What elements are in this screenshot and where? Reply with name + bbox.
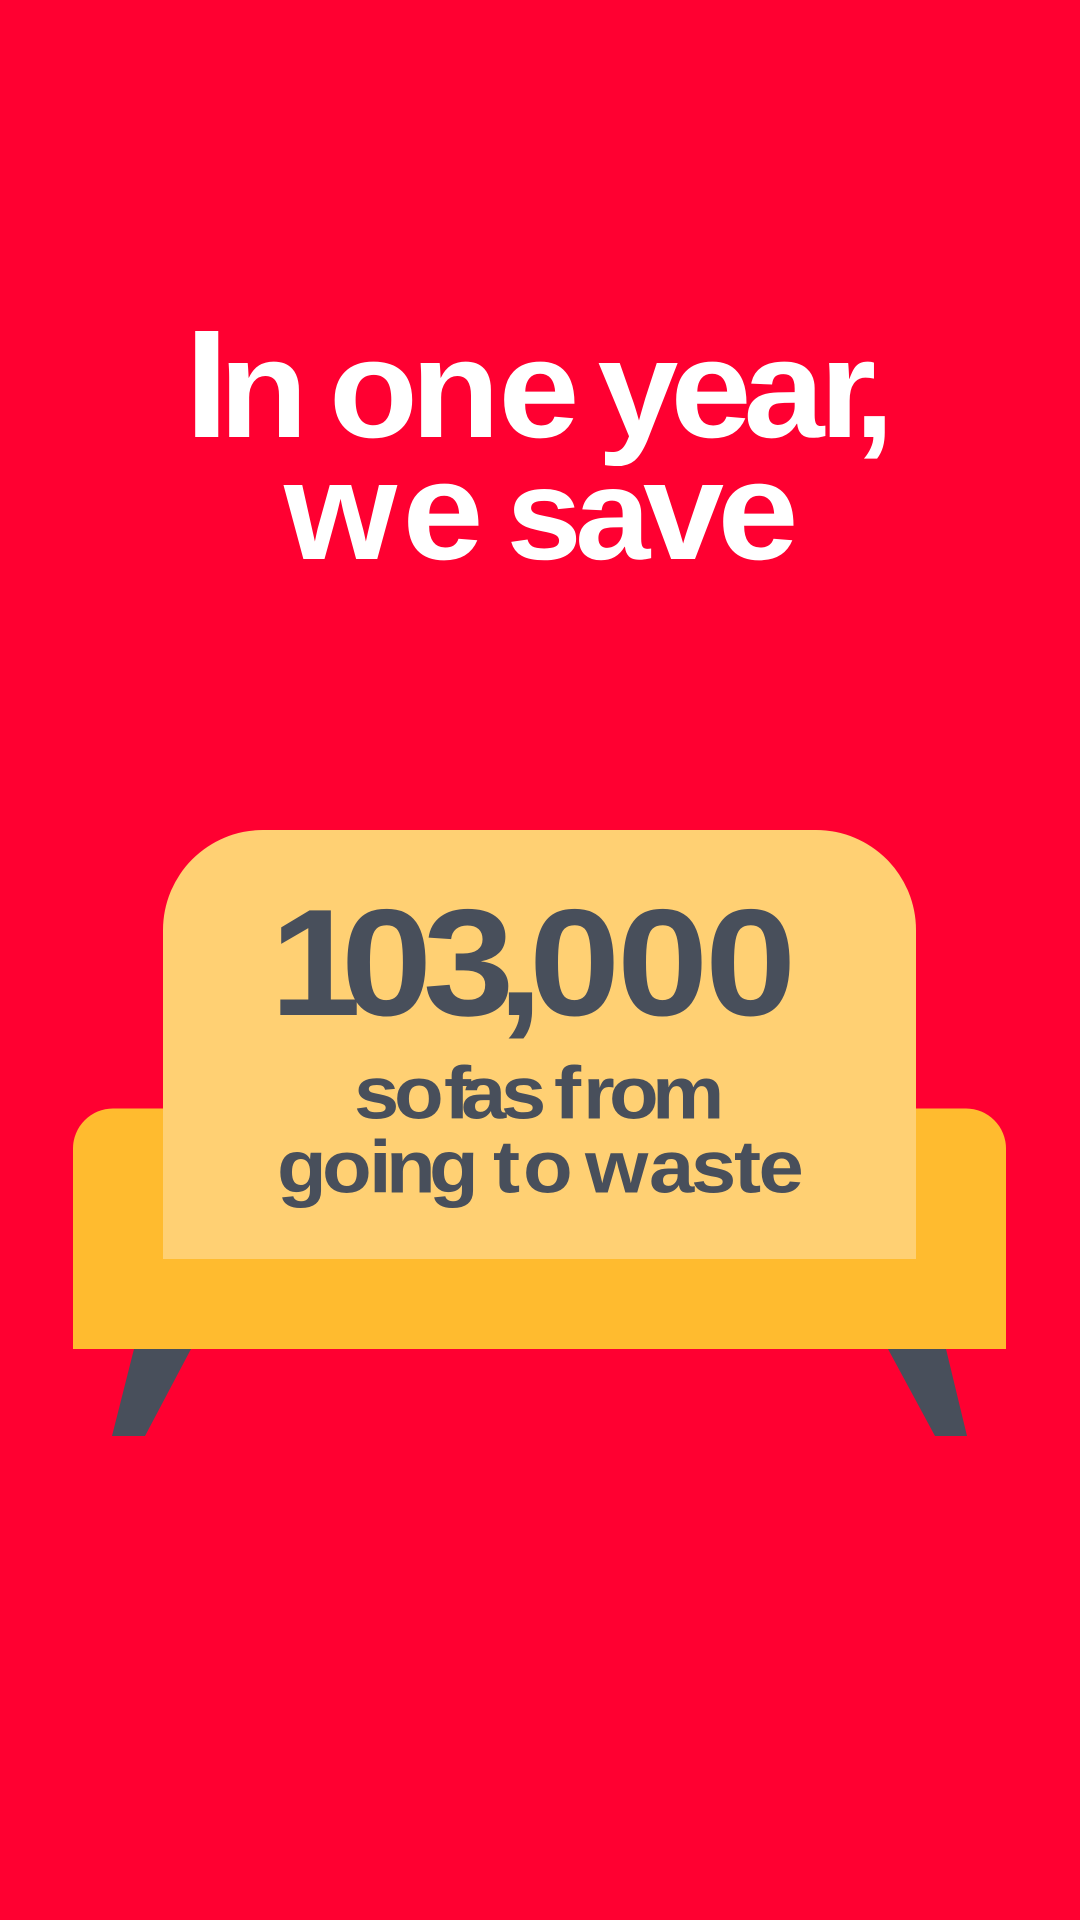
sofa back cushion [163, 830, 916, 1259]
statistic text [270, 878, 804, 1209]
title line 2: we save [283, 434, 798, 589]
sofa seat [73, 1108, 1006, 1349]
caption line 2: going to waste [277, 1127, 804, 1209]
title line 1: In one year, [184, 299, 895, 470]
title [184, 299, 895, 589]
sofa left leg [112, 1349, 191, 1436]
sofa right leg [888, 1349, 967, 1436]
caption line 1: sofas from [354, 1053, 724, 1135]
number: 103,000: 103,000 [270, 878, 796, 1048]
icon: sofa [73, 830, 1006, 1436]
